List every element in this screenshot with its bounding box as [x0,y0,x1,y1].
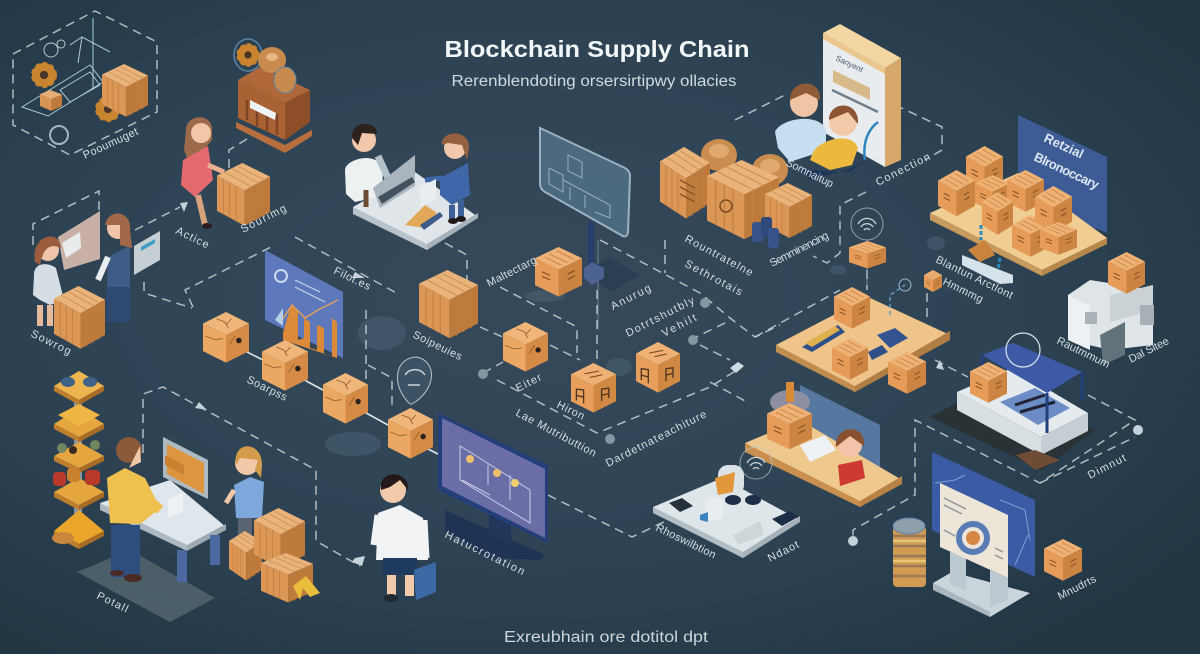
labels: Semminencing [768,229,831,270]
labels: Actice [174,225,211,251]
labels: Mnudrts [1056,573,1099,603]
labels: Dimnut [1086,452,1129,482]
labels: Dardetnateachiture [604,408,709,470]
billboard with two children: Sanyent [834,54,865,75]
cube chain center [503,247,680,412]
labels: Vehilt [660,312,699,340]
desk with laptop and two workers [345,124,478,250]
labels: Sourimg [239,202,289,236]
labels: Conection [874,151,933,189]
dashed network lines [13,11,1143,566]
labels: Rountratelne [683,233,755,279]
blueprint panel with poster on stand [932,452,1035,617]
chart panel [265,250,343,358]
labels: Pooumuget [81,125,141,162]
assembly platform with cubes [776,279,950,394]
labels: Hmmmg [941,276,985,306]
soft background smudges [325,236,945,456]
labels: Rautmmum [1055,335,1112,371]
cube chain lower left [203,270,478,459]
labels: Hiron [555,399,587,423]
boy with bag [374,474,436,602]
small cube lower right [1044,539,1082,581]
labels: Ndaot [766,539,802,565]
pedestal with gears [234,39,312,153]
workstation with man, woman and crates [77,437,320,622]
labels: Soarpss [245,374,289,404]
labels: Sowrog [29,328,73,358]
wifi node with cube [849,208,886,268]
labels: Soipeuies [411,329,464,363]
labels: Rhoswilbtion [654,522,718,562]
server stack with cube [1068,252,1154,365]
title: Blockchain Supply Chain [444,36,750,62]
labels: Anurug [609,282,654,313]
coin stack [893,518,926,587]
two people at board [33,211,160,349]
control platform with devices [653,447,800,558]
sign text: Blronoccary: Blronoccary [1032,149,1102,193]
labels: Sethrotais [683,258,745,299]
labels: Potall [95,590,131,616]
location pin icon [397,357,431,404]
footer caption: Exreubhain ore dotitol dpt [504,629,709,646]
large crates group with discs [660,139,812,248]
labels [29,125,1172,616]
subtitle: Rerenblendoting orsersirtipwy ollacies [452,73,737,90]
retail pallet with cube stack and sign [930,115,1107,276]
labels: Blantun Arctlont [934,254,1015,302]
labels: Hatucrotation [443,529,527,578]
labels: Somnaitup [784,157,836,190]
central glass screen on stand [540,128,640,292]
labels: Filot.es [332,265,373,293]
labels: Lae Mutributtion [514,407,599,460]
woman in pink with crate [181,117,270,229]
billboard with two children [775,24,901,180]
labels: Maltectarg [485,254,539,290]
monitor [438,413,548,560]
small orange cube [924,270,942,292]
sign text: Retzial: Retzial [1042,130,1086,161]
small loading dock item [962,225,1013,284]
labels: Eiter [514,371,544,395]
labels: Dotrtshutbly [624,294,697,340]
labels: Dal Sitee [1127,335,1172,366]
blueprint box illustration [22,18,148,144]
canopy bed machine [930,333,1095,470]
food tower [52,371,104,549]
study desk with child [745,382,902,507]
